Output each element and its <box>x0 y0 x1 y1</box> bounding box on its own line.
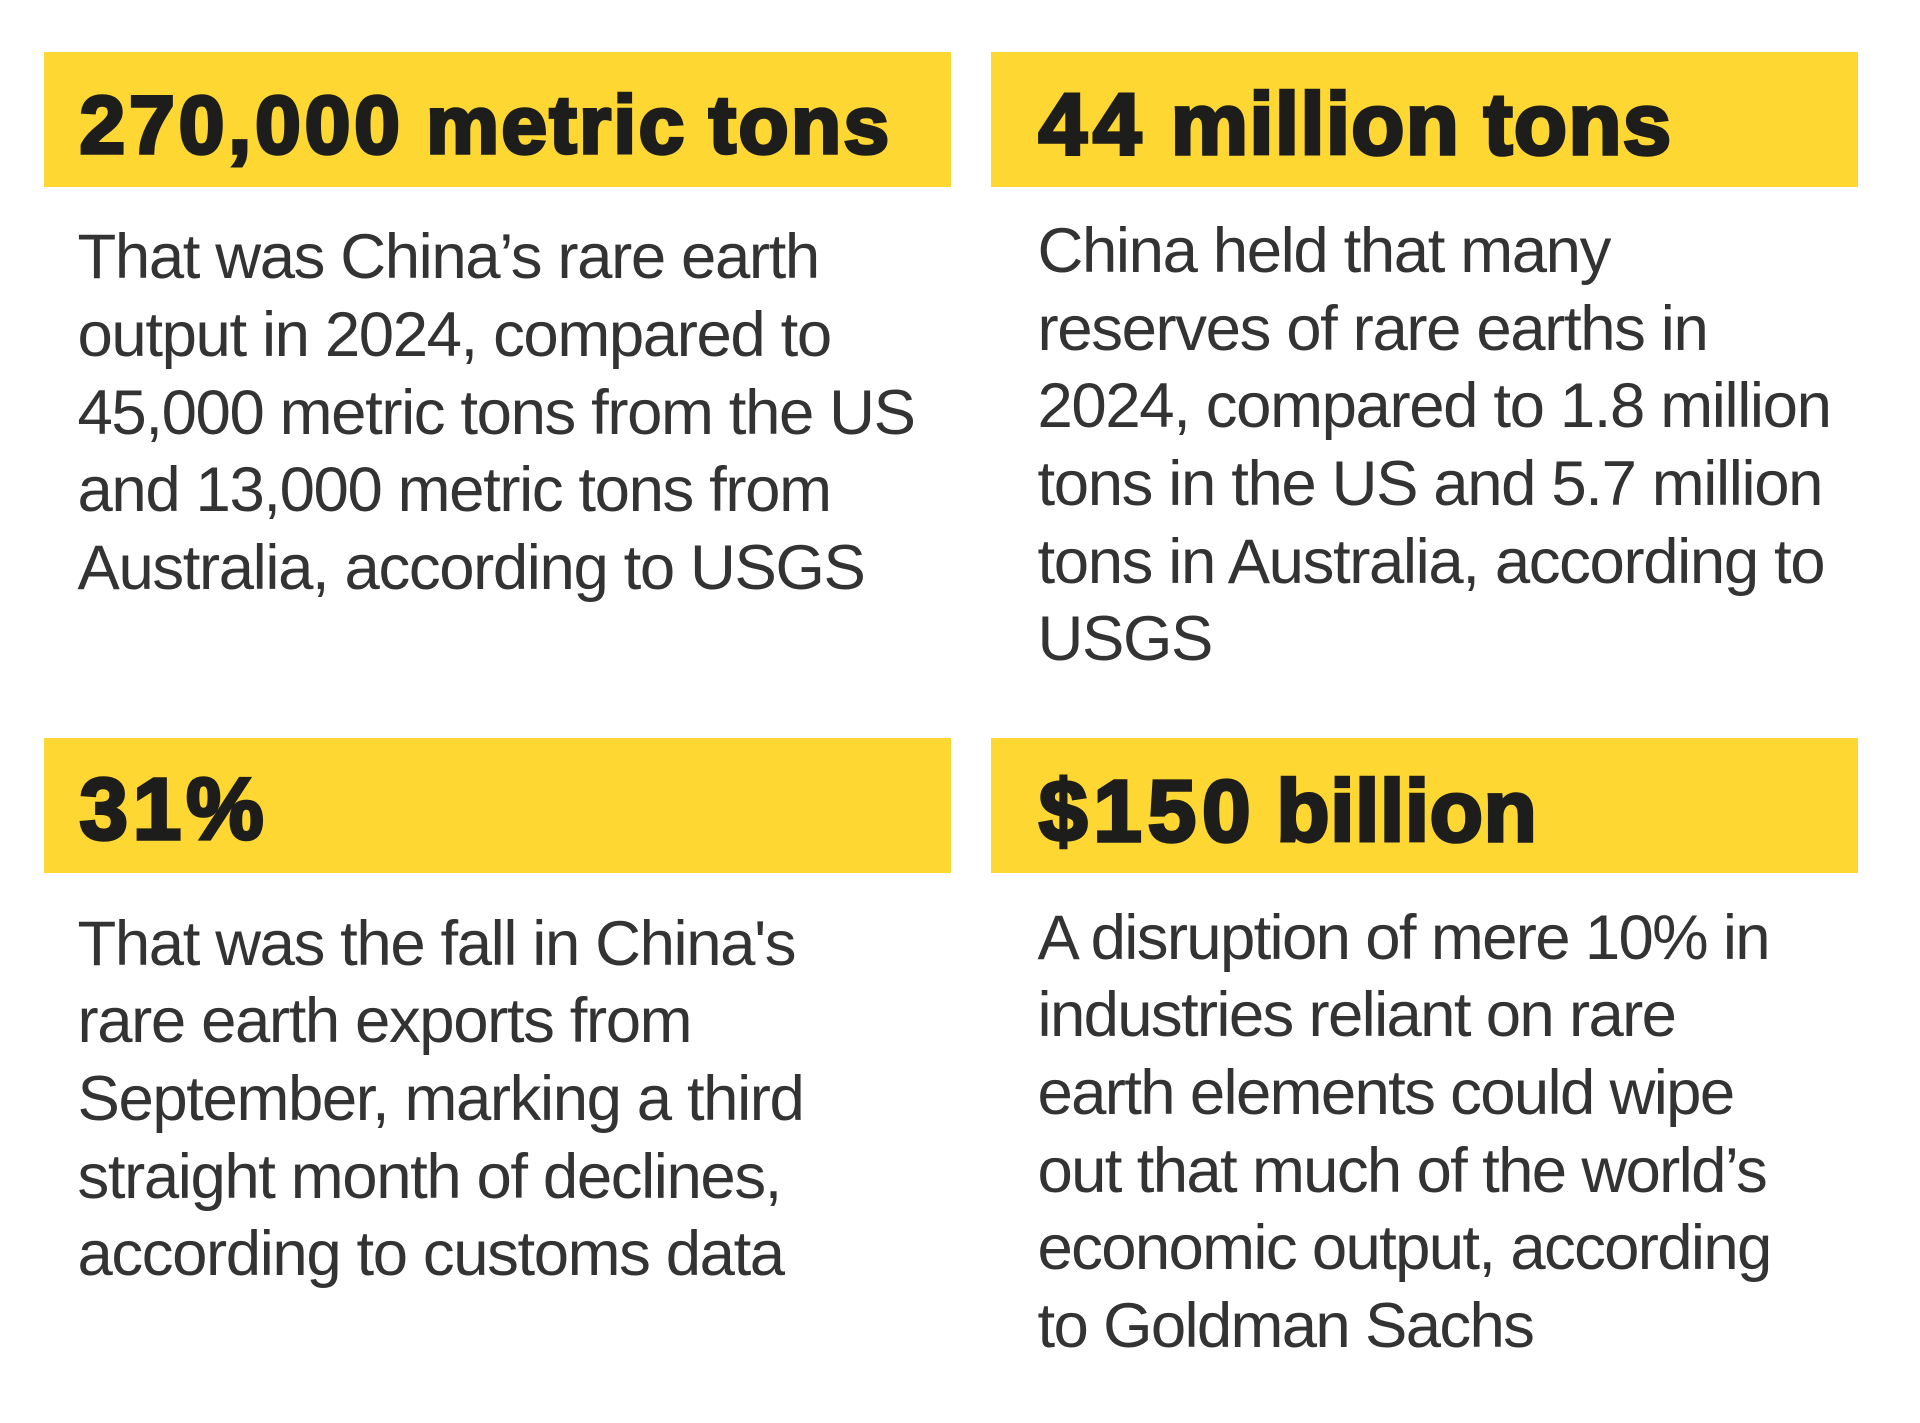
heading bar: 270,000 metric tons <box>44 52 951 187</box>
heading: 270,000 metric tons: 270,000 metric tons <box>80 80 892 171</box>
panel: export decline <box>44 738 951 1289</box>
heading: $150 billion: $150 billion <box>1039 762 1537 860</box>
panel: economic disruption <box>991 738 1858 1361</box>
heading bar: 44 million tons <box>991 52 1858 187</box>
heading: 31%: 31% <box>80 761 269 858</box>
heading bar: 31% <box>44 738 951 873</box>
heading bar: $150 billion <box>991 738 1858 873</box>
text: economic disruption description: A disruption of mere 10% in industries reliant on rare earth elements could wipe out that much of the world’s economic output, according to Goldman Sachs <box>1038 903 1771 1361</box>
text: China output description: That was China’s rare earth output in 2024, compared to 45,000 metric tons from the US and 13,000 metric tons from Australia, according to USGS <box>78 222 915 603</box>
panel: China reserves <box>991 52 1858 674</box>
panel: China output <box>44 52 951 603</box>
text: export decline description: That was the fall in China's rare earth exports from September, marking a third straight month of declines, according to customs data <box>78 909 803 1289</box>
text: China reserves description: China held that many reserves of rare earths in 2024, compared to 1.8 million tons in the US and 5.7 million tons in Australia, according to USGS <box>1038 216 1831 674</box>
heading: 44 million tons: 44 million tons <box>1038 76 1672 173</box>
